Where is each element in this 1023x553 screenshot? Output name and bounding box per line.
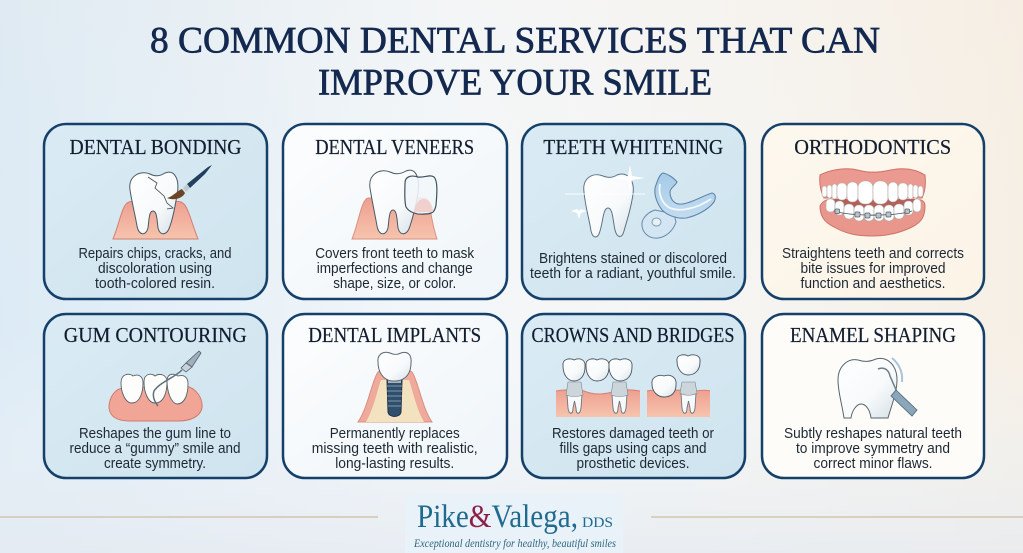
description: dental veneers xyxy=(315,245,475,292)
description: crowns and bridges: prosthetic devices. xyxy=(576,455,690,472)
panel: dental implants xyxy=(283,314,507,478)
description: crowns and bridges: Restores damaged teeth or xyxy=(552,425,714,442)
description: crowns and bridges xyxy=(552,425,714,472)
heading: enamel shaping: ENAMEL SHAPING xyxy=(790,323,956,347)
description: dental veneers: imperfections and change xyxy=(317,260,473,277)
description: dental implants xyxy=(312,425,478,472)
description: dental bonding: tooth-colored resin. xyxy=(95,275,215,292)
heading: gum contouring: GUM CONTOURING xyxy=(64,323,247,347)
panel: enamel shaping xyxy=(762,314,984,478)
logo: Pike & Valega, DDS xyxy=(405,494,623,553)
title: 8 COMMON DENTAL SERVICES THAT CAN xyxy=(150,20,880,62)
description: enamel shaping: to improve symmetry and xyxy=(796,440,950,457)
icon: crowns and bridge xyxy=(556,355,710,417)
panel: crowns and bridges xyxy=(522,314,745,478)
description: teeth whitening xyxy=(530,250,736,282)
description: orthodontics xyxy=(782,245,964,292)
description: dental implants: long-lasting results. xyxy=(335,455,454,472)
description: gum contouring: reduce a “gummy” smile and xyxy=(70,440,240,457)
heading: dental bonding: DENTAL BONDING xyxy=(70,135,242,159)
heading: orthodontics: ORTHODONTICS xyxy=(794,135,951,159)
panel: dental veneers xyxy=(283,124,507,299)
description: gum contouring: Reshapes the gum line to xyxy=(79,425,231,442)
panel: dental bonding xyxy=(44,124,267,299)
heading: dental veneers: DENTAL VENEERS xyxy=(315,135,474,159)
icon: white tooth and whitening tray xyxy=(565,165,715,238)
logo wordmark: Pike&Valega, xyxy=(417,499,578,535)
description: gum contouring xyxy=(70,425,240,472)
description: dental implants: missing teeth with realistic, xyxy=(312,440,478,457)
description: orthodontics: bite issues for improved xyxy=(800,260,946,277)
title: IMPROVE YOUR SMILE xyxy=(318,62,712,104)
panel: orthodontics xyxy=(762,124,984,299)
description: teeth whitening: teeth for a radiant, youthful smile. xyxy=(530,265,736,282)
lower teeth xyxy=(826,199,921,221)
title xyxy=(150,20,880,104)
icon: tooth with veneer xyxy=(352,170,437,239)
upper teeth xyxy=(822,181,923,204)
description: dental bonding: discoloration using xyxy=(98,260,212,277)
description: enamel shaping: correct minor flaws. xyxy=(814,455,932,472)
logo suffix: DDS xyxy=(582,515,613,531)
description: enamel shaping: Subtly reshapes natural teeth xyxy=(784,425,962,442)
panel: teeth whitening xyxy=(522,124,745,299)
heading: teeth whitening: TEETH WHITENING xyxy=(543,135,723,159)
heading: crowns and bridges: CROWNS AND BRIDGES xyxy=(532,323,734,347)
description: gum contouring: create symmetry. xyxy=(104,455,206,472)
description: dental veneers: shape, size, or color. xyxy=(333,275,456,292)
icon: tooth repair with brush xyxy=(113,165,212,239)
description: orthodontics: function and aesthetics. xyxy=(800,275,946,292)
description: enamel shaping xyxy=(784,425,962,472)
description: dental implants: Permanently replaces xyxy=(330,425,460,442)
heading: dental implants: DENTAL IMPLANTS xyxy=(308,323,481,347)
icon: enamel shaping tool xyxy=(838,358,917,418)
description: crowns and bridges: fills gaps using caps and xyxy=(560,440,706,457)
description: teeth whitening: Brightens stained or discolored xyxy=(539,250,727,267)
description: orthodontics: Straightens teeth and corrects xyxy=(782,245,964,262)
description: dental bonding xyxy=(78,245,232,292)
icon: gum contouring tool xyxy=(109,351,202,421)
panel: gum contouring xyxy=(44,314,267,478)
icon: teeth with braces xyxy=(820,169,925,236)
description: dental bonding: Repairs chips, cracks, and xyxy=(78,245,232,262)
logo tagline: Exceptional dentistry for healthy, beautiful smiles xyxy=(413,538,616,550)
description: dental veneers: Covers front teeth to mask xyxy=(315,245,475,262)
icon: dental implant xyxy=(358,352,432,422)
